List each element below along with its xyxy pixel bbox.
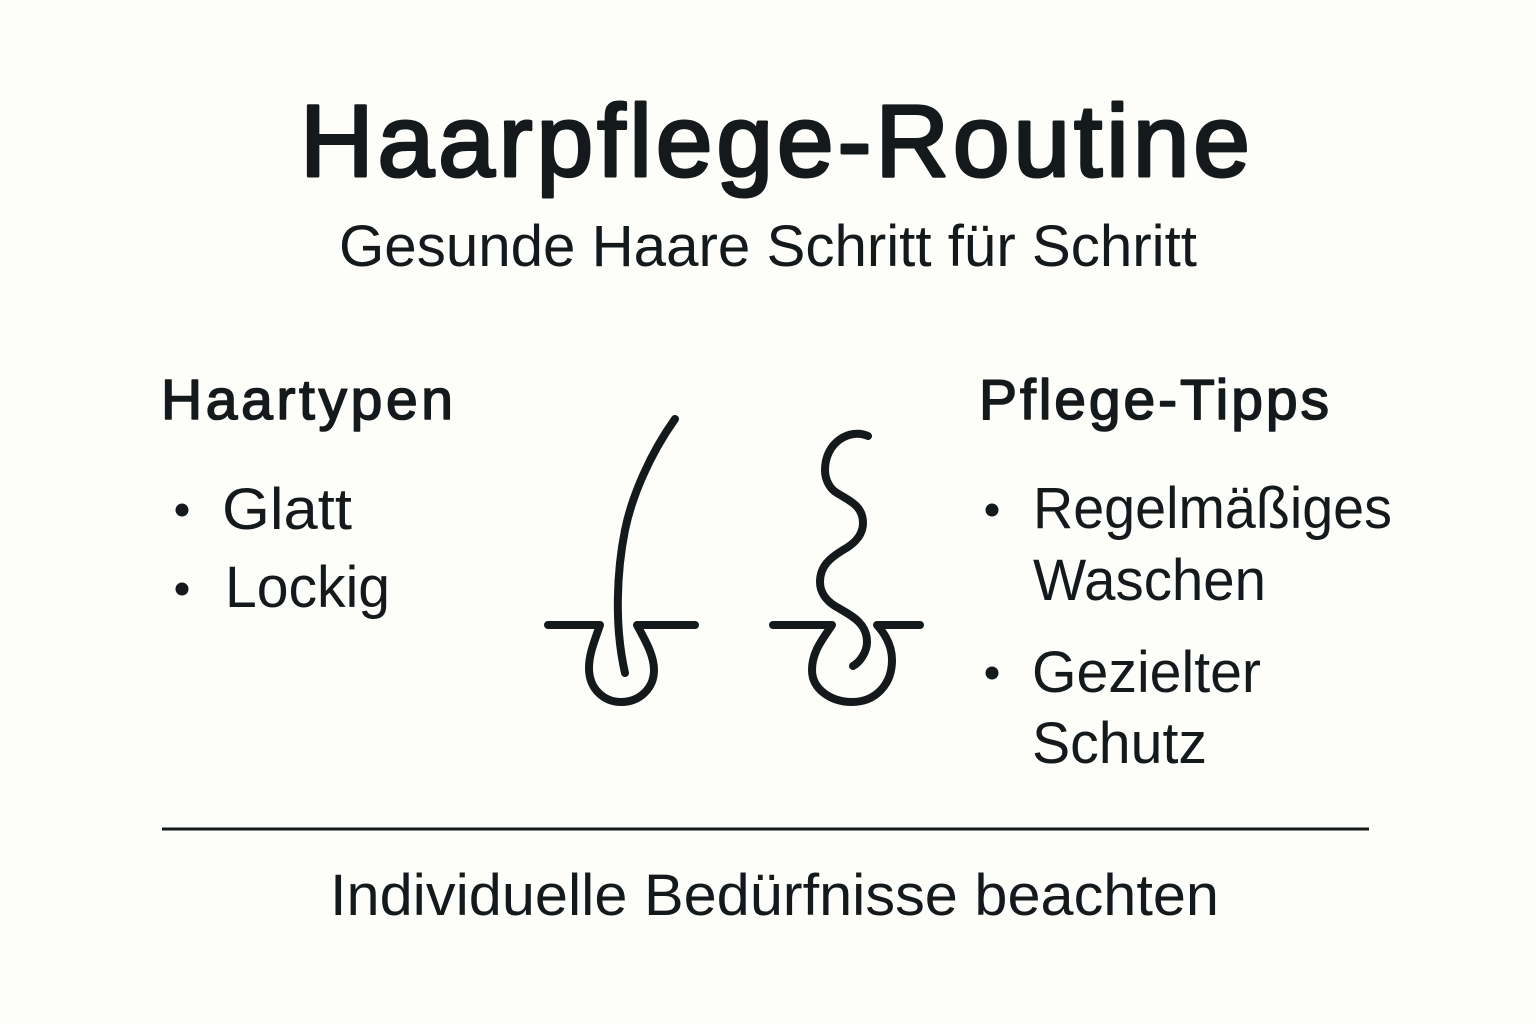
- panel: Pflege-Tipps: [979, 368, 1392, 776]
- list item: Regelmäßiges Waschen: Waschen: [1033, 548, 1266, 613]
- icon: curly hair: [773, 434, 920, 702]
- heading: Pflege-Tipps: Pflege-Tipps: [979, 368, 1329, 432]
- list item: Gezielter Schutz: [986, 640, 1261, 776]
- list item: Glatt: [176, 477, 352, 542]
- heading: Haartypen: Haartypen: [161, 368, 453, 432]
- footer text: Individuelle Bedürfnisse beachten: [330, 863, 1219, 928]
- list item: Gezielter Schutz: Schutz: [1032, 711, 1207, 776]
- list item: Glatt: Glatt: [222, 477, 352, 542]
- list item: Gezielter Schutz: Gezielter: [1032, 640, 1261, 705]
- subtitle: Gesunde Haare Schritt für Schritt: [339, 214, 1197, 279]
- title: Haarpflege-Routine: [300, 84, 1250, 198]
- list item: Lockig: Lockig: [225, 555, 390, 620]
- list item: Regelmäßiges Waschen: Regelmäßiges: [1033, 476, 1392, 541]
- list item: Regelmäßiges Waschen: [986, 476, 1392, 613]
- icon: straight hair: [548, 419, 695, 702]
- panel: Haartypen: [161, 368, 453, 620]
- icon: hair follicles: [548, 419, 920, 702]
